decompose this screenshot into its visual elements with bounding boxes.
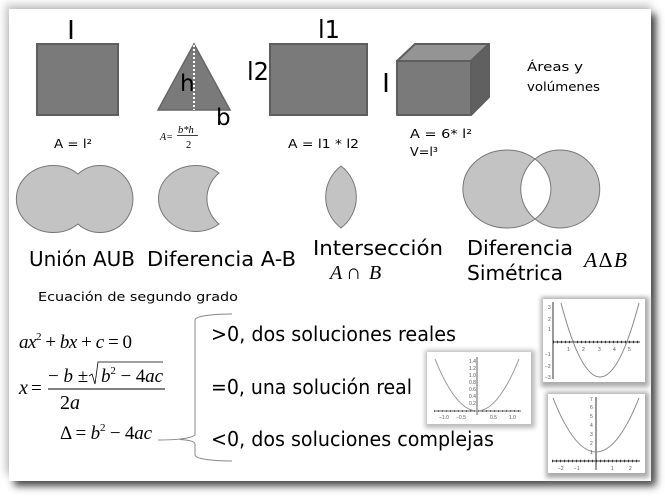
chart: parabola with no real roots: −1 <box>574 466 580 472</box>
formula: triangle area: 2 <box>186 140 191 151</box>
diagram: symmetric difference <box>463 150 600 228</box>
chart: parabola with one root: 0.4 <box>469 394 476 400</box>
label: side l1: l1 <box>318 15 340 44</box>
label: difference: Diferencia A-B <box>147 247 296 271</box>
text: two complex solutions: <0, dos soluciones complejas <box>211 427 494 451</box>
chart: parabola with two roots: 2 <box>548 317 551 323</box>
heading: areas and volumes <box>527 59 600 94</box>
heading: areas and volumes: volúmenes <box>527 79 600 94</box>
formula: quadratic solution: b <box>101 366 110 387</box>
formula: square area: A = l² <box>54 136 92 151</box>
chart: parabola with one root: 1.2 <box>469 366 476 372</box>
label: base b: b <box>216 105 231 131</box>
diagram: difference A-B <box>159 166 219 232</box>
heading: areas and volumes: Áreas y <box>527 59 584 74</box>
diagram: intersection <box>326 166 356 228</box>
formula: quadratic solution: 2a <box>60 392 80 414</box>
chart: parabola with one root: −1.0 <box>439 415 449 421</box>
label: intersection: A <box>328 262 343 284</box>
label: symmetric difference: Simétrica <box>467 261 563 285</box>
formula: quadratic solution: − b ± <box>48 366 88 387</box>
chart: parabola with two roots: 3 <box>598 347 601 353</box>
label: union: Unión AUB <box>29 247 135 271</box>
label: symmetric difference: Diferencia <box>467 236 573 260</box>
formula: triangle area: b*h <box>178 125 194 136</box>
formula: quadratic solution: − 4 <box>116 366 146 387</box>
label: side l2: l2 <box>247 57 269 86</box>
label: cube side l: l <box>382 69 390 98</box>
label: intersection: B <box>369 262 381 284</box>
label: height h: h <box>180 71 195 97</box>
chart: parabola with one root: 1.0 <box>509 415 516 421</box>
icon: square <box>37 16 118 115</box>
formula: discriminant: ac <box>134 423 153 444</box>
chart: parabola with two roots: 1 <box>567 347 570 353</box>
formula: cube area and volume: A = 6* l² <box>410 126 472 141</box>
label: intersection <box>313 236 443 284</box>
icon: rectangle <box>270 15 367 115</box>
chart: parabola with two roots: 4 <box>613 347 616 353</box>
formula: triangle area <box>159 125 198 151</box>
chart: parabola with one root <box>425 350 535 428</box>
formula: discriminant: Δ = b <box>60 423 100 444</box>
label: intersection: ∩ <box>346 260 361 284</box>
brace <box>158 314 232 461</box>
formula: cube area and volume: V=l³ <box>410 144 438 159</box>
chart: parabola with one root: 0.2 <box>469 401 476 407</box>
chart: parabola with no real roots: 3 <box>590 432 593 438</box>
chart: parabola with two roots: −2 <box>545 364 551 370</box>
label: symmetric difference <box>467 236 573 285</box>
chart: parabola with no real roots: −2 <box>558 466 564 472</box>
formula: quadratic solution: x <box>18 377 28 399</box>
chart: parabola with two roots: 2 <box>582 347 585 353</box>
formula: quadratic equation: bx + c = 0 <box>60 332 132 353</box>
chart: parabola with two roots: −3 <box>545 375 551 381</box>
formula: quadratic solution: 2 <box>110 365 116 377</box>
chart: parabola with one root: 0.5 <box>490 415 497 421</box>
chart: parabola with no real roots: 1 <box>611 466 614 472</box>
chart: parabola with one root: 1.0 <box>469 373 476 379</box>
formula: rectangle area: A = l1 * l2 <box>288 136 359 151</box>
formula: quadratic equation: ax <box>19 332 37 353</box>
formula: A delta B: AΔB <box>582 248 627 272</box>
text: one real solution: =0, una solución real <box>211 375 412 399</box>
label: side l: l <box>67 16 75 45</box>
chart: parabola with no real roots: 2 <box>629 466 632 472</box>
formula: quadratic equation: + <box>41 332 60 353</box>
formula: quadratic solution: ac <box>145 366 164 387</box>
chart: parabola with two roots: −1 <box>545 352 551 358</box>
formula: discriminant: 2 <box>100 422 105 434</box>
chart: parabola with two roots: 3 <box>548 305 551 311</box>
chart: parabola with no real roots: 4 <box>590 423 593 429</box>
chart: parabola with one root: 0.8 <box>469 380 476 386</box>
chart: parabola with two roots: 1 <box>548 327 551 333</box>
chart: parabola with no real roots: 6 <box>590 405 593 411</box>
formula: triangle area: A= <box>159 132 173 143</box>
chart: parabola with no real roots <box>546 392 649 478</box>
heading: quadratic equation: Ecuación de segundo grado <box>38 289 238 304</box>
formula: quadratic equation: 2 <box>36 331 42 343</box>
formula: quadratic solution <box>18 362 165 414</box>
chart: parabola with one root: 1.4 <box>469 359 476 365</box>
formula: discriminant: − 4 <box>105 423 135 444</box>
chart: parabola with no real roots: 1 <box>590 450 593 456</box>
chart: parabola with no real roots: 5 <box>590 414 593 420</box>
icon: triangle <box>158 44 231 131</box>
formula: cube area and volume <box>410 126 472 159</box>
chart: parabola with one root: −0.5 <box>456 415 466 421</box>
chart: parabola with no real roots: 7 <box>590 397 593 403</box>
diagram: union <box>16 165 133 232</box>
chart: parabola with two roots: 5 <box>628 347 631 353</box>
label: intersection: Intersección <box>313 236 443 260</box>
chart: parabola with no real roots: 2 <box>590 441 593 447</box>
chart: parabola with two roots <box>541 297 649 387</box>
formula: quadratic solution: = <box>31 378 42 399</box>
chart: parabola with one root: 0.6 <box>469 387 476 393</box>
icon: cube <box>397 44 489 115</box>
text: two real solutions: >0, dos soluciones reales <box>211 322 456 346</box>
